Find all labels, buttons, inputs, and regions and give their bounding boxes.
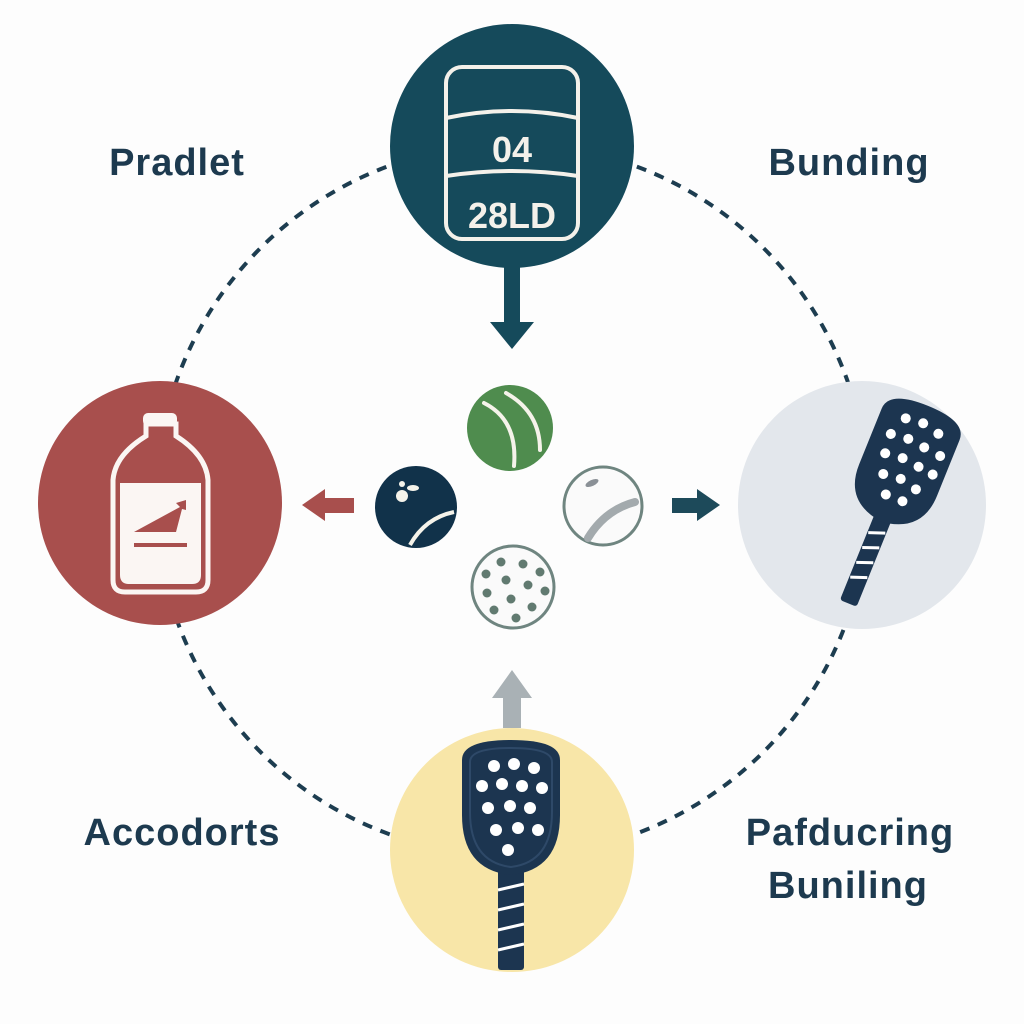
node: bottom yellow circle with paddle	[390, 728, 634, 972]
ball: white	[564, 467, 642, 545]
arrow: up from bottom	[492, 670, 532, 728]
label: Bunding: Bunding	[768, 142, 930, 184]
node: right grey circle with paddle	[738, 381, 986, 629]
dashed cycle ring	[156, 144, 868, 856]
ball: dotted	[472, 546, 554, 628]
label: Pafducring Buniling	[746, 812, 954, 907]
node: top teal circle with container: 28LD	[468, 195, 556, 236]
label: Pradlet: Pradlet	[109, 142, 245, 184]
node: top teal circle with container	[390, 24, 634, 268]
arrow: right	[672, 489, 720, 521]
label: Pafducring Buniling: Pafducring	[746, 812, 954, 854]
label: Accodorts: Accodorts	[84, 812, 280, 854]
node: left red circle with bottle	[38, 381, 282, 625]
arrow: left	[302, 489, 354, 521]
label: Pafducring Buniling: Buniling	[768, 865, 928, 907]
node: top teal circle with container: 04	[492, 129, 532, 170]
ball: green	[467, 385, 553, 471]
ball: dark navy	[375, 466, 457, 548]
arrow: down from top	[490, 266, 534, 349]
